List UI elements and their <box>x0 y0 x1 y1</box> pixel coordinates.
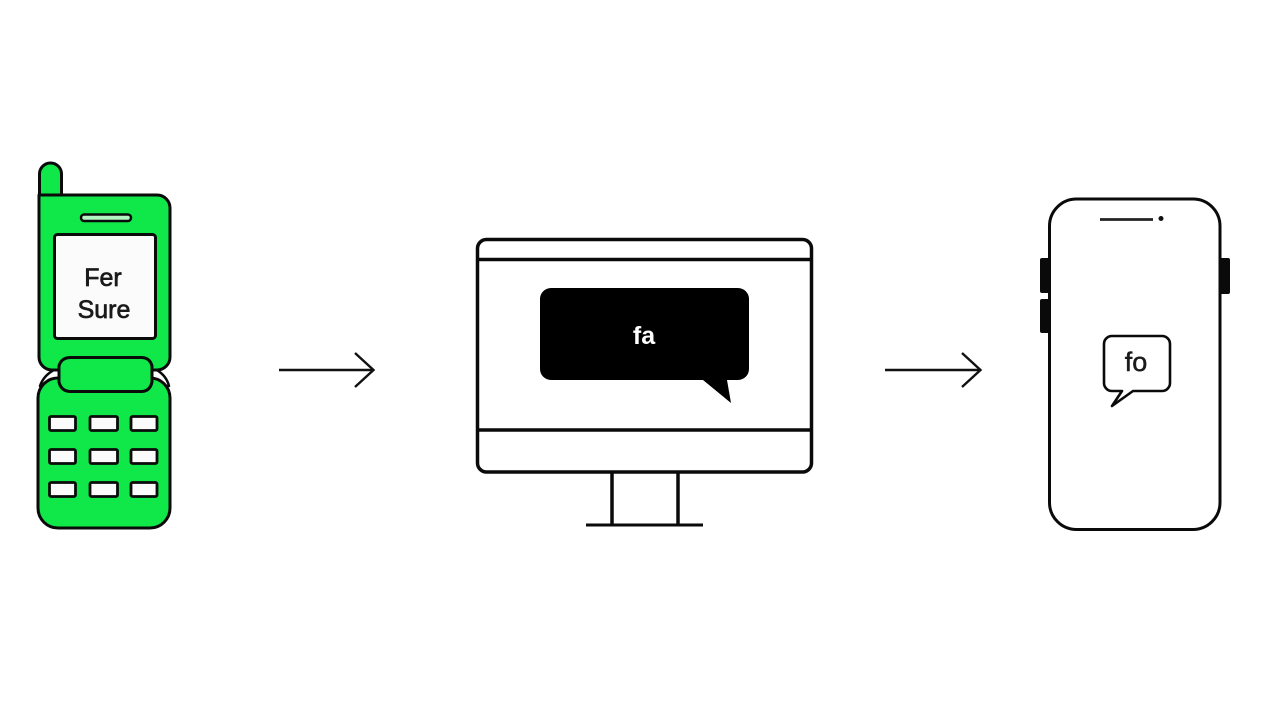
phone screen <box>54 234 156 338</box>
monitor base <box>586 524 703 526</box>
line two: Sure <box>78 296 130 324</box>
speaker slot <box>81 214 131 221</box>
black speech bubble <box>540 288 749 403</box>
bubble text: fa <box>633 322 656 350</box>
line one: Fer <box>84 264 122 292</box>
icon: desktop monitor <box>478 240 812 525</box>
icon: smartphone <box>1040 199 1230 530</box>
hinge gap <box>40 368 169 386</box>
hinge <box>59 358 152 392</box>
antenna <box>40 163 62 196</box>
icon: green flip phone <box>38 163 170 528</box>
upper body <box>39 195 170 370</box>
keypad <box>50 416 157 496</box>
monitor frame <box>478 240 812 472</box>
phone body <box>1050 199 1220 530</box>
screen text <box>78 264 130 324</box>
top bar line <box>478 258 811 261</box>
small speech bubble <box>1104 336 1170 406</box>
bottom bar line <box>478 428 811 432</box>
camera dot <box>1158 216 1164 221</box>
monitor stand <box>612 472 678 525</box>
bubble text: fo <box>1125 347 1147 377</box>
arrow: monitor to smartphone <box>885 353 980 387</box>
lower body <box>38 378 170 528</box>
side buttons <box>1040 258 1230 333</box>
arrow: phone to monitor <box>279 353 374 387</box>
earpiece <box>1100 218 1153 221</box>
